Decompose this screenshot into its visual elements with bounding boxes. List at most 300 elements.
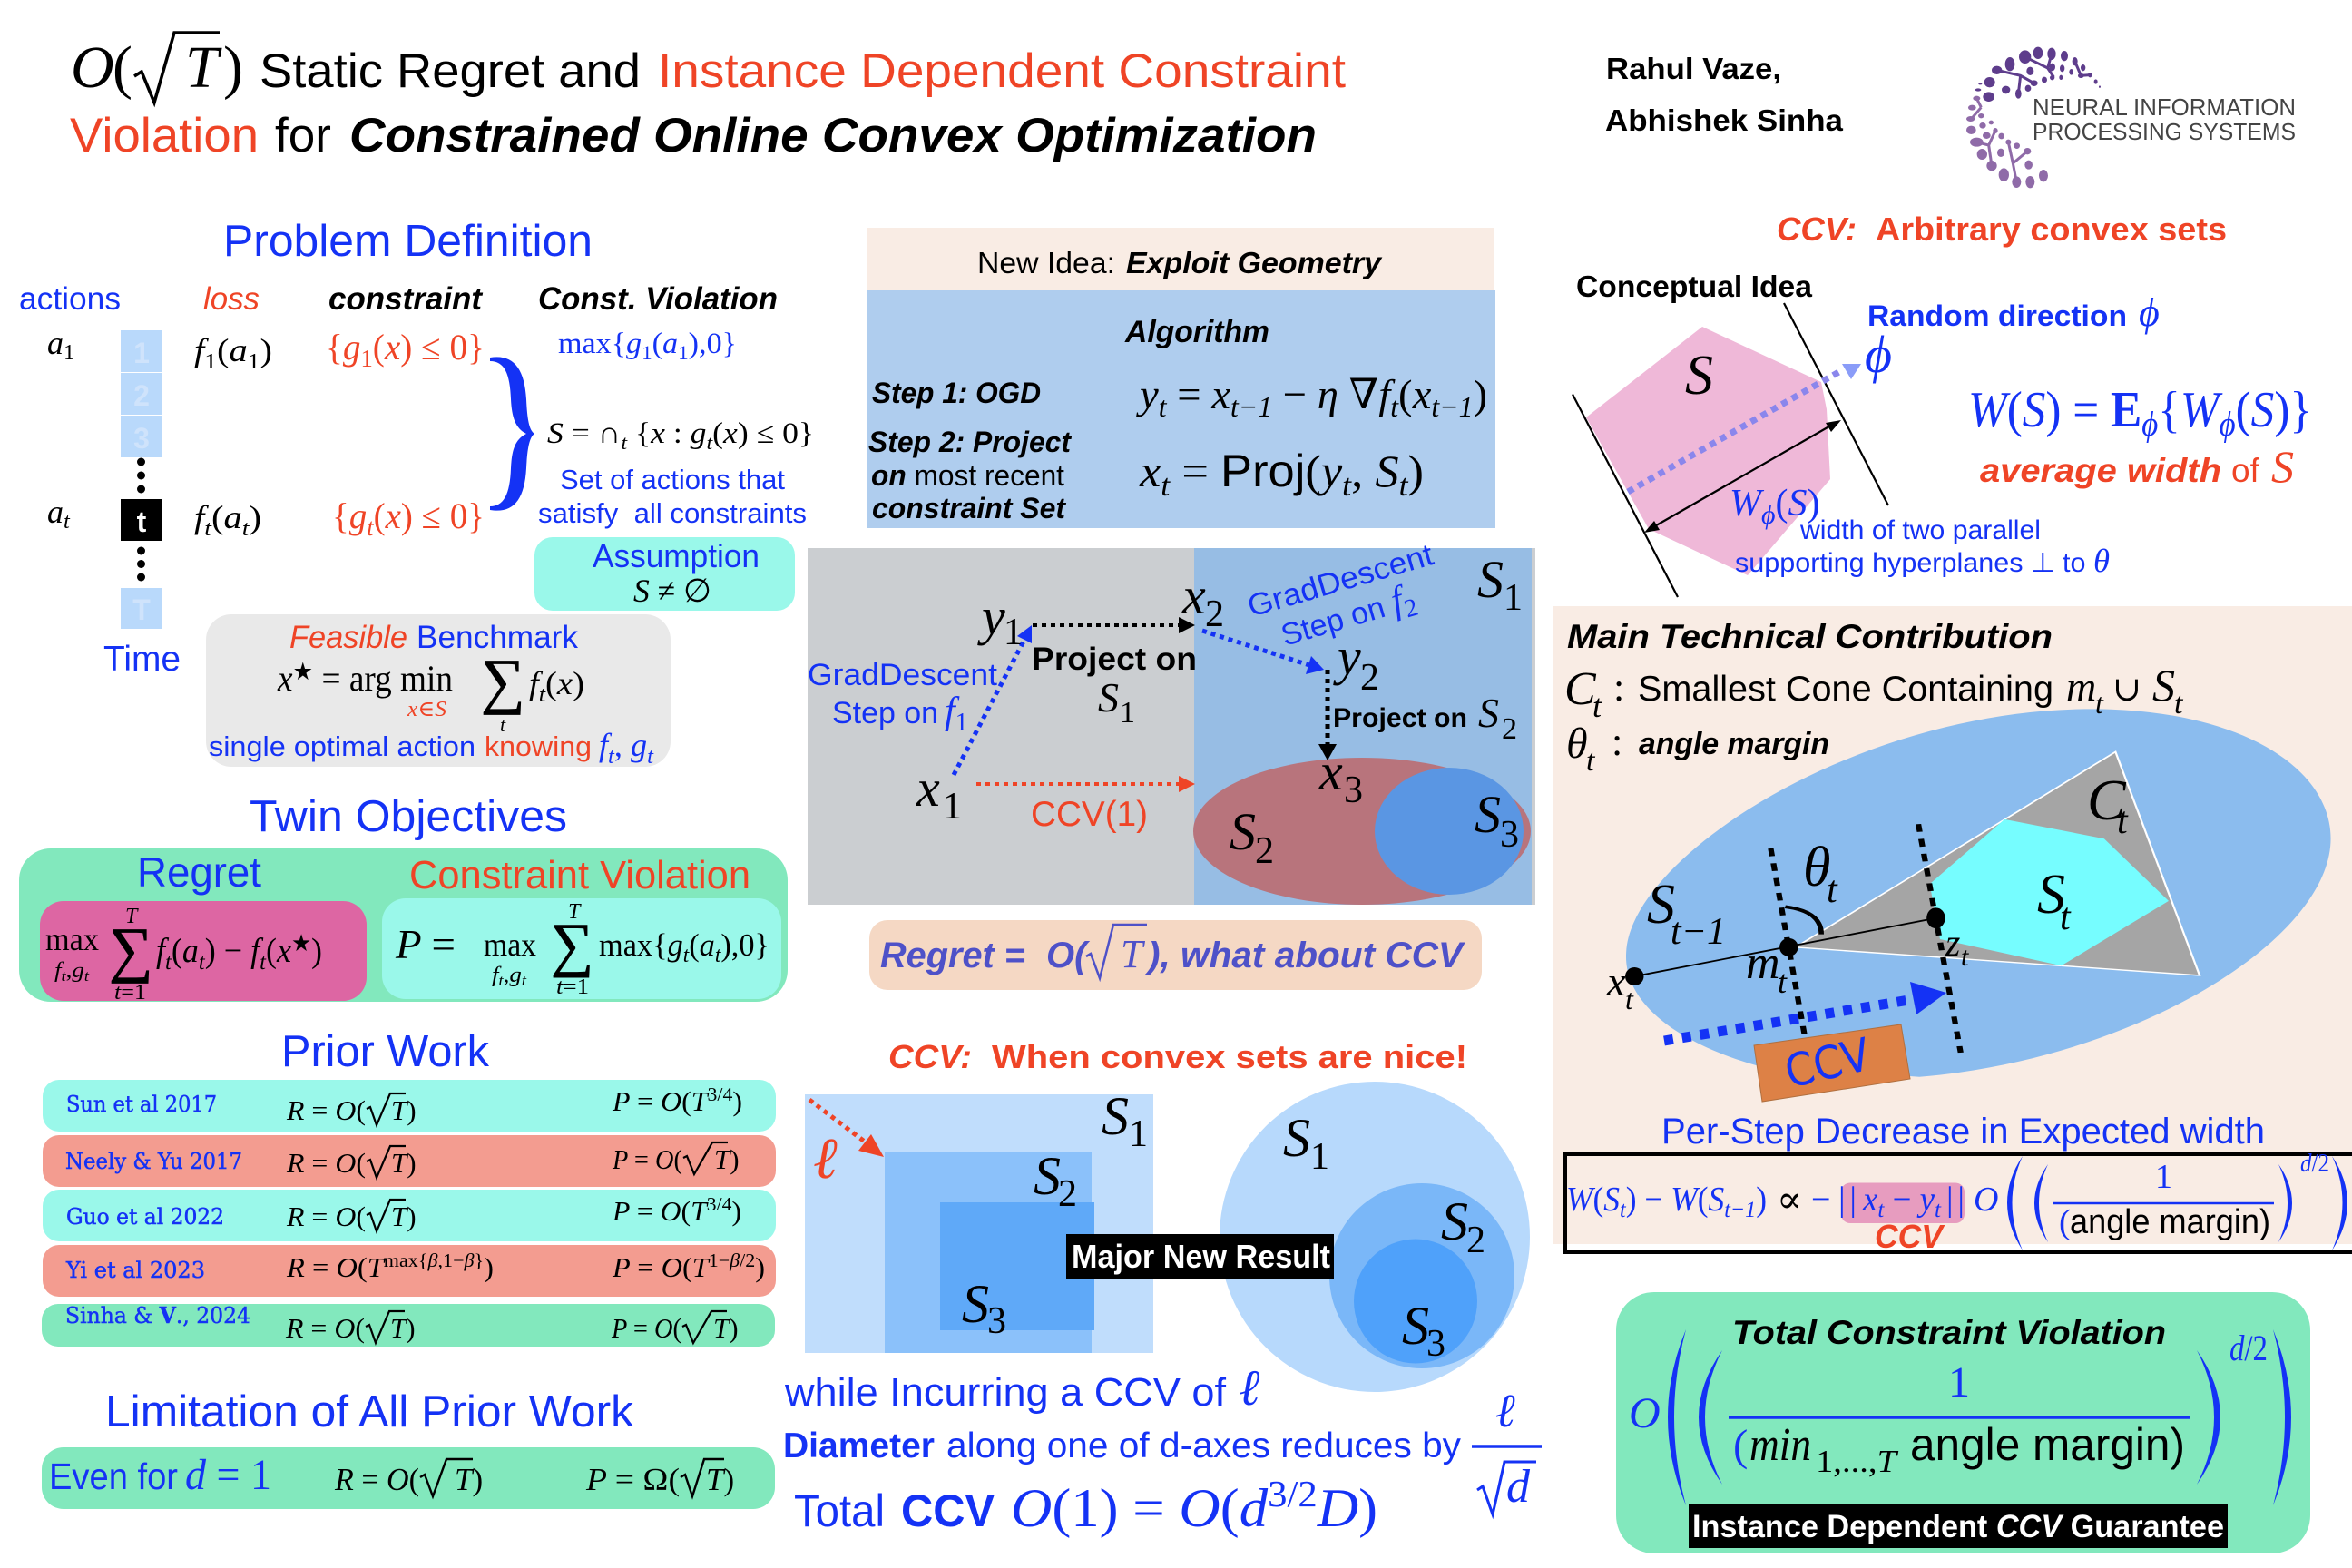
diagram labels: t [1778, 964, 1788, 1000]
per-step formula box: ) − [1626, 1181, 1671, 1219]
actions and losses: a [223, 499, 240, 535]
actions and losses: t [204, 516, 212, 541]
constraint violation formula: ),0} [720, 927, 769, 963]
regret formula: t [165, 948, 172, 975]
row: Yi et al 2023: Yi et al 2023 [65, 1258, 205, 1283]
average width formula [1968, 382, 2312, 492]
actions and losses: a [47, 494, 64, 530]
panel: arbitrary convex sets [1573, 211, 2312, 597]
total CCV formula: CCV [901, 1485, 995, 1536]
actions and losses: ( [217, 332, 230, 368]
step annotations: CCV(1) [1031, 795, 1148, 834]
projection formula: t [1161, 469, 1171, 503]
average width formula: W(S) = E [1968, 382, 2144, 438]
constraints: ( [374, 495, 386, 536]
row: Yi et al 2023: R = O(T [287, 1251, 383, 1283]
point and set labels: x [1319, 742, 1343, 801]
feasible set formula: x) ≤ 0} [723, 417, 808, 450]
row: Sun et al 2017: 3/4 [708, 1083, 733, 1105]
text: width description: width of two parallel [1799, 515, 2041, 545]
step annotations: Project on [1333, 703, 1467, 733]
constraint violation formula: t [715, 944, 722, 967]
circular nested sets: 2 [1466, 1220, 1485, 1261]
row: Sun et al 2017: R = O( [286, 1094, 366, 1126]
row: Guo et al 2022: T) [391, 1200, 416, 1232]
authors: Abhishek Sinha [1605, 103, 1844, 137]
title: Static Regret and [260, 44, 641, 98]
diagram labels: t [2060, 897, 2072, 938]
title: Instance Dependent Constraint [658, 44, 1346, 98]
row: Yi et al 2023: β,1−β} [427, 1250, 484, 1271]
guarantee formula: 1,...,T [1816, 1444, 1899, 1479]
row: Sun et al 2017 [43, 1080, 776, 1132]
diagram labels: θ [1803, 837, 1830, 898]
diagram labels: t [1961, 942, 1969, 972]
OGD formula: x [1413, 371, 1431, 417]
actions and losses: 1 [248, 349, 260, 374]
constraint violation formula: f [492, 964, 498, 987]
constraint violation formula: T [568, 900, 582, 924]
constraint violation formula: 1 [678, 341, 689, 364]
time axis stack: 2 [133, 379, 150, 412]
row: Yi et al 2023: ) [755, 1251, 765, 1283]
average width formula: W [2180, 382, 2223, 438]
feasible set formula: ( [712, 417, 723, 450]
feasible set formula: { [627, 417, 651, 450]
algorithm box: on most recent [871, 459, 1064, 492]
constraint violation formula: ( [652, 328, 662, 360]
fraction: l over root d: d [1506, 1461, 1531, 1513]
per-step formula box: W(S [1671, 1181, 1726, 1219]
circular nested sets: 1 [1310, 1136, 1329, 1178]
point and set labels [916, 550, 1523, 872]
title [70, 33, 1346, 162]
definition: angle margin: : [1612, 720, 1622, 764]
constraint violation formula: ∑ [551, 912, 593, 978]
point and set labels: 2 [1502, 712, 1517, 746]
feasible set note: Set of actions that [560, 464, 785, 495]
label: random direction [1867, 290, 2160, 335]
time axis stack: 1 [133, 337, 150, 369]
explanation text: along one of d-axes reduces by [946, 1426, 1462, 1465]
actions and losses: ) [249, 499, 261, 535]
row: Sinha and V 2024: Sinha & V., 2024 [65, 1302, 250, 1328]
row: Guo et al 2022: Guo et al 2022 [66, 1204, 224, 1230]
diagram: cone and projection [1606, 709, 2331, 1102]
label: CCV box: CCV [1780, 1028, 1875, 1099]
square nested sets: 1 [1129, 1113, 1148, 1155]
callout: regret what about CCV: T [1121, 932, 1146, 976]
feasible benchmark box: x∈S [407, 698, 446, 721]
authors: Rahul Vaze, [1606, 52, 1781, 85]
definition: cone: C [1564, 663, 1596, 715]
panel background [1553, 606, 2352, 1244]
row: Neely and Yu 2017: T) [391, 1147, 416, 1179]
feasible benchmark box: , [614, 727, 631, 763]
row: Yi et al 2023: max{ [384, 1250, 427, 1271]
regret formula: max [45, 921, 99, 957]
per-step formula box: t [1935, 1196, 1942, 1222]
point and set labels: S [1478, 690, 1499, 736]
explanation text: ℓ [1239, 1360, 1260, 1416]
text: width description: supporting hyperplanes ⊥ to θ [1735, 543, 2110, 579]
heading: problem definition: Problem Definition [223, 217, 593, 266]
per-step formula box: O [1974, 1181, 1998, 1219]
point and set labels: S [1475, 785, 1501, 844]
feasible benchmark box: t [500, 713, 506, 736]
authors [1605, 52, 1844, 137]
arrows: descent and projection [954, 617, 1337, 792]
row: Neely and Yu 2017: T) [714, 1143, 740, 1175]
point and set labels: S [1230, 802, 1256, 861]
constraint violation formula: max{g [558, 328, 642, 360]
constraint violation formula: P = [395, 921, 456, 967]
point and set labels: 2 [1255, 830, 1274, 872]
heading: arbitrary sets: CCV: [1777, 211, 1857, 248]
limitation row: P = Ω( [585, 1462, 680, 1497]
feasible benchmark box: single optimal action [209, 730, 475, 762]
per-step formula box: − [1811, 1181, 1830, 1219]
regret formula: t [260, 948, 267, 975]
row: Sun et al 2017: Sun et al 2017 [66, 1092, 217, 1117]
row: Yi et al 2023: 1− [709, 1250, 730, 1271]
point and set labels: 2 [1360, 657, 1379, 699]
diagram labels [1606, 768, 2129, 1015]
regret formula: T [125, 905, 139, 928]
row: Guo et al 2022: R = O( [286, 1200, 366, 1232]
regret formula: ) [311, 932, 322, 970]
algorithm box: Algorithm [1124, 315, 1269, 349]
per-step formula box: − [1884, 1181, 1920, 1219]
constraint violation formula: 1 [642, 341, 652, 364]
actions and losses: 1 [64, 340, 74, 365]
total CCV formula [794, 1474, 1377, 1538]
fraction: l over root d: ℓ [1495, 1386, 1515, 1437]
definition: cone: t [2174, 687, 2184, 720]
diagram labels: t−1 [1671, 911, 1726, 953]
step annotations: 2 [1401, 593, 1421, 623]
per-step formula box: W(S [1566, 1181, 1621, 1219]
title: Violation [70, 109, 259, 162]
assumption box: S ≠ ∅ [633, 573, 711, 609]
OGD formula: t−1 [1431, 391, 1473, 423]
panel: total constraint violation guarantee [1616, 1292, 2310, 1553]
regret formula: t [62, 967, 66, 985]
label: conceptual idea: Conceptual Idea [1576, 270, 1813, 303]
total CCV formula: ) [1358, 1478, 1377, 1538]
projection formula: , [1351, 446, 1375, 496]
total CCV formula: D [1317, 1478, 1358, 1538]
panel: twin objectives [19, 792, 788, 1004]
point and set labels: 1 [943, 786, 962, 828]
column headers: Const. Violation [538, 281, 778, 317]
row: Sinha and V 2024: R = O( [285, 1312, 365, 1344]
projection formula: x [1140, 446, 1160, 496]
diagram: width of set: S [1685, 345, 1713, 407]
label: random direction: Random direction [1867, 299, 2127, 332]
actions and losses: t [242, 516, 250, 541]
title: ( [113, 34, 132, 101]
guarantee formula: ( [1733, 1420, 1748, 1470]
panel: limitation of prior work [42, 1387, 775, 1509]
step annotations [808, 537, 1467, 834]
constraint violation formula: ),0} [689, 328, 737, 360]
definition: cone: : [1613, 665, 1624, 710]
row: Yi et al 2023: P = O(T [612, 1251, 708, 1283]
regret formula: t [199, 948, 205, 975]
definition: cone: t [1592, 688, 1602, 724]
regret formula: ★ [291, 930, 311, 956]
constraint violation formula: t=1 [556, 975, 589, 999]
diagram: width of set: ϕ [1761, 500, 1776, 530]
heading: nice sets: CCV: [888, 1038, 972, 1075]
limitation row: d = 1 [185, 1451, 271, 1499]
OGD formula: = [1167, 371, 1211, 417]
diagram: width of set: ϕ [1865, 325, 1892, 384]
constraints [326, 327, 485, 541]
arrow: CCV step [1664, 982, 1946, 1041]
objectives container: Regret [137, 848, 261, 896]
row: Guo et al 2022: ) [731, 1195, 741, 1227]
point and set labels: S [1098, 674, 1119, 720]
row: Sun et al 2017: ) [732, 1085, 742, 1117]
row: Neely and Yu 2017: R = O( [286, 1147, 366, 1179]
guarantee formula: min [1749, 1419, 1811, 1471]
point and set labels: 1 [1120, 696, 1135, 730]
constraints: {g [332, 495, 368, 536]
convex set shapes [1625, 709, 2331, 1077]
constraints: 1 [360, 345, 373, 372]
projection formula: t [1342, 469, 1353, 503]
icon: brace [490, 357, 534, 511]
logo text: PROCESSING SYSTEMS [2033, 118, 2296, 145]
regret formula: , [66, 959, 72, 983]
label: CCV box [1754, 1024, 1910, 1102]
projection formula: ) [1408, 446, 1424, 496]
diagram labels: S [1647, 874, 1675, 936]
feasible benchmark box: t [608, 744, 615, 769]
per-step formula box: ∝ [1777, 1180, 1802, 1221]
callout: regret what about CCV: O( [1046, 936, 1091, 975]
label: time: Time [103, 640, 181, 679]
constraint violation formula [382, 898, 781, 999]
feasible benchmark box: = arg min [313, 658, 453, 699]
actions and losses: t [64, 509, 71, 534]
label: random direction: ϕ [2139, 290, 2160, 335]
guarantee formula: 1 [1948, 1358, 1970, 1406]
circular nested sets [1220, 1082, 1530, 1392]
limitation row: T) [455, 1462, 483, 1497]
step annotations: Project on [1032, 642, 1197, 677]
total CCV formula: 3/2 [1268, 1474, 1318, 1514]
regret formula: ( [266, 932, 277, 970]
regret formula: ) − [205, 932, 250, 970]
panel: main technical contribution [1553, 606, 2352, 1255]
definition: cone: Smallest Cone Containing [1638, 670, 2053, 709]
per-step formula box: CCV [1875, 1218, 1945, 1255]
row: Sinha and V 2024: T) [390, 1312, 416, 1344]
feasible benchmark box [206, 614, 671, 769]
heading: nice sets: When convex sets are nice! [992, 1038, 1467, 1075]
title: for [275, 109, 331, 162]
diagram labels: t [1625, 983, 1634, 1015]
constraint violation formula: t [499, 972, 504, 989]
feasible set formula: t [706, 431, 713, 454]
feasible benchmark box: x) [557, 665, 583, 701]
actions and losses [47, 325, 272, 541]
square nested sets: ℓ [813, 1126, 838, 1191]
constraint violation formula: t [683, 944, 691, 967]
point and set labels: 3 [1500, 814, 1519, 856]
OGD formula: t [1390, 391, 1399, 423]
title: ) [223, 34, 243, 101]
regret formula: t [84, 967, 90, 985]
per-step formula box: y [1920, 1181, 1936, 1219]
point and set labels: 2 [1205, 593, 1224, 635]
actions and losses: a [47, 325, 64, 361]
title: O [71, 34, 114, 101]
new idea header: New Idea: [977, 246, 1115, 279]
big parentheses [2007, 1156, 2347, 1250]
square nested sets [805, 1086, 1153, 1353]
point and set labels: y [1338, 627, 1361, 686]
guarantee formula: O [1629, 1389, 1661, 1437]
row: Guo et al 2022: 3/4 [707, 1193, 732, 1215]
regret formula: x [277, 932, 292, 970]
step annotations: f [945, 691, 956, 732]
text: width description [1735, 515, 2110, 579]
feasible benchmark box: ∑ [481, 646, 524, 715]
constraints: ( [373, 327, 385, 368]
diagram: width of set [1573, 303, 1892, 597]
feasible benchmark box: ( [545, 665, 557, 701]
per-step formula box: || [1838, 1181, 1857, 1219]
assumption box: Assumption [593, 537, 760, 574]
constraint violation formula: a [662, 328, 678, 360]
panel: nice convex sets [783, 1038, 1542, 1538]
per-step formula box: t−1 [1724, 1196, 1756, 1222]
algorithm box: constraint Set [872, 492, 1066, 524]
OGD formula: t [1159, 391, 1168, 423]
label: major new result: Major New Result [1072, 1238, 1330, 1275]
OGD formula: ) [1473, 371, 1487, 417]
feasible benchmark box: x [277, 658, 293, 699]
constraints: x) ≤ 0} [385, 327, 486, 368]
feasible benchmark box: f [529, 665, 538, 701]
background regions [808, 548, 1535, 905]
square nested sets: S [962, 1274, 989, 1334]
square nested sets: S [1102, 1086, 1129, 1146]
square nested sets: 3 [987, 1300, 1006, 1342]
circular nested sets: S [1402, 1296, 1429, 1356]
regret formula: ∑ [109, 915, 152, 984]
feasible benchmark box: t [539, 682, 546, 707]
heading: limitation: Limitation of All Prior Work [105, 1387, 634, 1436]
heading: prior work: Prior Work [281, 1027, 489, 1076]
OGD formula: η ∇f [1318, 371, 1390, 417]
point and set labels: x [916, 759, 940, 818]
logo text: NEURAL INFORMATION [2033, 93, 2296, 121]
new idea header [867, 228, 1494, 290]
row: Sun et al 2017: T) [391, 1094, 416, 1126]
row: Neely and Yu 2017: Neely & Yu 2017 [65, 1149, 242, 1174]
actions and losses: f [194, 332, 203, 368]
diagram labels: t [1827, 869, 1838, 911]
OGD formula: t−1 [1230, 391, 1272, 423]
row: Sinha and V 2024 [42, 1302, 775, 1347]
feasible benchmark box: ★ [293, 658, 313, 685]
average width formula: average width [1980, 452, 2221, 489]
definition: cone: t [2095, 687, 2104, 720]
average width formula: of [2231, 452, 2260, 489]
square nested sets: S [1034, 1146, 1061, 1206]
column headers [19, 281, 778, 317]
step annotations: GradDescent [1244, 537, 1437, 624]
step annotations: Step on f [1278, 579, 1408, 653]
regret formula: a [182, 932, 200, 970]
icon: logo dot arc [1966, 47, 2101, 188]
per-step formula box: x [1863, 1181, 1878, 1219]
per-step formula box: angle margin) [2070, 1203, 2270, 1241]
diagram labels: m [1746, 937, 1780, 989]
title: Constrained Online Convex Optimization [349, 109, 1317, 162]
average width formula: { [2158, 382, 2180, 438]
per-step formula box: || [1946, 1181, 1965, 1219]
new idea header: Exploit Geometry [1126, 246, 1383, 279]
point and set labels: 1 [1004, 612, 1023, 653]
callout: regret what about CCV [869, 920, 1482, 990]
feasible benchmark box: Benchmark [416, 620, 578, 655]
limitation row: Even for [49, 1455, 178, 1497]
average width formula: ϕ [2220, 406, 2236, 444]
circular nested sets: S [1283, 1108, 1310, 1168]
row: Neely and Yu 2017: P = O( [612, 1143, 682, 1175]
step annotations: GradDescent [808, 658, 998, 692]
diagram labels: C [2087, 768, 2126, 832]
step annotations: 1 [956, 709, 968, 737]
row: Guo et al 2022 [43, 1190, 776, 1241]
feasible benchmark box: Feasible [289, 620, 407, 655]
per-step formula box: ( [2059, 1203, 2071, 1241]
regret formula: f [250, 932, 260, 970]
constraint violation formula: a [700, 927, 715, 963]
panel: prior work [42, 1027, 776, 1347]
panel: geometry diagram [808, 537, 1535, 905]
row: Sinha and V 2024: T) [713, 1312, 739, 1344]
point and set labels: S [1477, 550, 1504, 609]
definition: cone: ∪ [2112, 671, 2141, 709]
actions and losses: 1 [204, 349, 217, 374]
column headers: loss [203, 281, 260, 317]
row: Yi et al 2023 [43, 1245, 776, 1297]
explanation text: Diameter [783, 1426, 935, 1465]
explanation text [783, 1360, 1462, 1465]
explanation text: while Incurring a CCV of [784, 1370, 1227, 1415]
heading: arbitrary sets: Arbitrary convex sets [1876, 211, 2227, 248]
per-step formula box: 1 [2155, 1158, 2172, 1196]
total CCV formula: O(1) = O(d [1011, 1478, 1267, 1538]
constraint violation formula: max{g [599, 927, 683, 963]
per-step formula box: ) [1756, 1181, 1767, 1219]
guarantee formula [1629, 1328, 2291, 1505]
regret formula: ( [172, 932, 182, 970]
diagram labels: z [1945, 923, 1960, 965]
feasible set note: satisfy all constraints [538, 497, 807, 529]
definition: angle margin: angle margin [1639, 727, 1829, 761]
row: Guo et al 2022: P = O(T [612, 1195, 706, 1227]
point and set labels: x [1182, 566, 1206, 625]
per-step formula box [1565, 1150, 2352, 1255]
